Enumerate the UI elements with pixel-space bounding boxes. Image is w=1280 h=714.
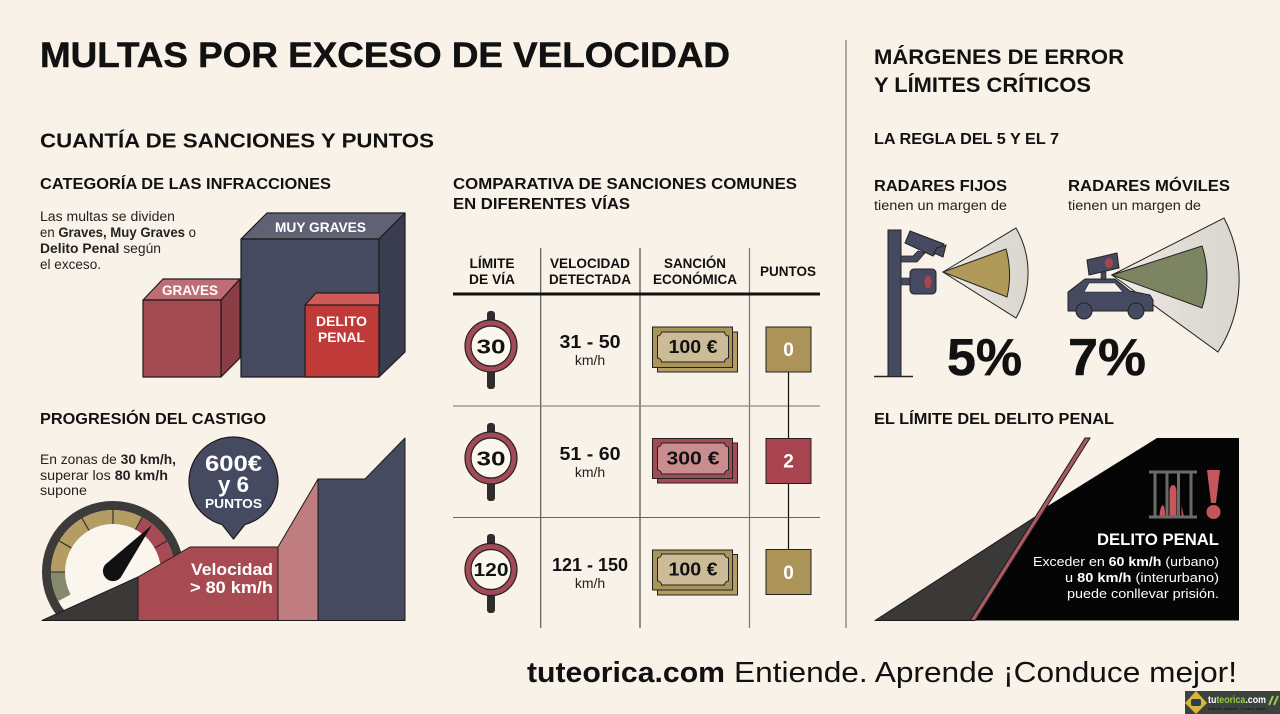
- box: 0 points: 0: [783, 563, 794, 584]
- table header: DETECTADA: [549, 272, 631, 287]
- logo: tuteorica.com: Entiende. Aprende. Conduce mejor.: [1208, 706, 1266, 711]
- table header: SANCIÓN: [664, 256, 726, 271]
- heading: márgenes de error: Y LÍMITES CRÍTICOS: [874, 74, 1091, 97]
- icon: speed sign 30: [465, 423, 517, 501]
- text: speed range: 51 - 60: [560, 443, 620, 464]
- icon: speed sign 120: [465, 534, 517, 613]
- icon: banknote 100 €: [652, 327, 738, 372]
- text: speed range: [560, 443, 620, 480]
- heading: márgenes de error: MÁRGENES DE ERROR: [874, 46, 1124, 69]
- row: 30 km/h, 51-60: [465, 423, 811, 501]
- icon: speed sign 30: 30: [476, 336, 506, 358]
- box: 0 points: [766, 550, 811, 594]
- row: 120 km/h, 121-150: [465, 534, 811, 613]
- table header: LÍMITE: [470, 256, 514, 271]
- block: graves: GRAVES: [162, 283, 218, 298]
- text: speed range: 31 - 50: [560, 331, 620, 352]
- heading: radares fijos: tienen un margen de: [874, 198, 1007, 213]
- text block: categorías: [40, 209, 196, 272]
- heading: radares móviles: RADARES MÓVILES: [1068, 176, 1230, 195]
- stat: 7%: 7%: [1068, 329, 1146, 387]
- icon: banknote 300 €: [652, 438, 738, 483]
- heading: comparativa: EN DIFERENTES VÍAS: [453, 194, 630, 213]
- table header: VELOCIDAD: [550, 256, 630, 271]
- panel: radares móviles: [1068, 176, 1239, 387]
- heading: categoría: CATEGORÍA DE LAS INFRACCIONES: [40, 174, 331, 193]
- icon: prison bars: [1149, 472, 1197, 517]
- logo: tuteorica.com: [1185, 691, 1280, 714]
- box: 2 points: [766, 438, 811, 484]
- callout: 600€ y 6 puntos: PUNTOS: [205, 497, 262, 511]
- box: 0 points: 0: [783, 340, 794, 361]
- text block: categorías: Delito Penal según: [40, 241, 161, 256]
- stat: 5%: 5%: [947, 329, 1022, 387]
- text block: categorías: Las multas se dividen: [40, 209, 175, 224]
- panel: radares fijos: [874, 178, 1028, 387]
- table header: [469, 256, 816, 287]
- text: speed range: km/h: [575, 352, 605, 368]
- row: 30 km/h, 31-50: [465, 311, 811, 389]
- label: velocidad: [190, 560, 273, 597]
- chart: escalating ramp: [42, 438, 405, 620]
- table header: PUNTOS: [760, 264, 816, 279]
- callout: 600€ y 6 puntos: 600€: [205, 451, 262, 476]
- callout: 600€ y 6 puntos: y 6: [218, 472, 249, 497]
- label: velocidad: Velocidad: [191, 560, 273, 579]
- text: speed range: km/h: [575, 464, 605, 480]
- block: delito penal: PENAL: [318, 330, 365, 345]
- heading: comparativa: [453, 176, 797, 213]
- text block: delito penal: DELITO PENAL: [1097, 531, 1219, 549]
- panel: comparativa de sanciones: [453, 176, 820, 628]
- icon: banknote 100 €: 100 €: [668, 337, 718, 357]
- icon: banknote 300 €: 300 €: [666, 448, 720, 468]
- chart: penal ramp: [875, 438, 1239, 620]
- icon: banknote 100 €: [652, 550, 738, 595]
- text block: delito penal: Exceder en 60 km/h (urbano): [1033, 554, 1219, 569]
- heading: comparativa: COMPARATIVA DE SANCIONES COMUNES: [453, 176, 797, 193]
- icon: radar cone: [1112, 218, 1239, 352]
- text block: delito penal: u 80 km/h (interurbano): [1065, 570, 1219, 585]
- icon: fixed radar post: [874, 230, 946, 376]
- block: delito penal: DELITO: [316, 314, 367, 329]
- icon: speed sign 120: 120: [474, 559, 508, 580]
- heading: el límite: EL LÍMITE DEL DELITO PENAL: [874, 409, 1114, 428]
- label: velocidad: > 80 km/h: [190, 578, 273, 597]
- block: muy graves: MUY GRAVES: [275, 219, 366, 235]
- connector line: points: [788, 372, 790, 549]
- panel: categoría de las infracciones: [40, 174, 405, 377]
- block: muy graves: [241, 213, 405, 377]
- table header: DE VÍA: [469, 272, 515, 287]
- icon: exclamation: [1206, 470, 1220, 519]
- panel: progresión del castigo: [40, 409, 405, 638]
- icon: radar car: [1068, 253, 1153, 319]
- block: delito penal: [305, 293, 379, 377]
- text block: delito penal: puede conllevar prisión.: [1067, 586, 1219, 601]
- text: speed range: [552, 554, 628, 591]
- block: graves: [143, 279, 240, 377]
- text block: progresión: superar los 80 km/h: [40, 468, 168, 483]
- box: 2 points: 2: [783, 452, 794, 472]
- heading: progresión: PROGRESIÓN DEL CASTIGO: [40, 409, 266, 428]
- text block: progresión: [40, 452, 176, 498]
- footer tagline: [527, 657, 1237, 689]
- text block: progresión: En zonas de 30 km/h,: [40, 452, 176, 467]
- table header: ECONÓMICA: [653, 272, 737, 287]
- text block: progresión: supone: [40, 483, 87, 498]
- footer tagline: tuteorica.com: [527, 657, 725, 689]
- icon: radar cone: [943, 228, 1028, 318]
- heading: cuantía de sanciones: CUANTÍA DE SANCIONES Y PUNTOS: [40, 130, 434, 152]
- icon: speed sign 30: [465, 311, 517, 389]
- heading: radares fijos: [874, 178, 1007, 213]
- text block: categorías: en Graves, Muy Graves o: [40, 225, 196, 240]
- callout: 600€ y 6 puntos: [189, 437, 278, 539]
- heading: regla del 5 y el 7: LA REGLA DEL 5 Y EL 7: [874, 131, 1059, 148]
- logo: tuteorica.com: tuteorica.com: [1208, 695, 1266, 706]
- heading: márgenes de error: [874, 46, 1124, 97]
- box: 0 points: [766, 327, 811, 372]
- text block: categorías: el exceso.: [40, 257, 101, 272]
- text block: delito penal: [1033, 531, 1219, 601]
- footer tagline: Entiende. Aprende ¡Conduce mejor!: [734, 657, 1237, 689]
- heading: radares fijos: RADARES FIJOS: [874, 178, 1007, 195]
- title: MULTAS POR EXCESO DE VELOCIDAD: [40, 36, 730, 75]
- icon: needle: [103, 525, 152, 581]
- icon: banknote 100 €: 100 €: [668, 560, 718, 580]
- heading: radares móviles: [1068, 176, 1230, 213]
- panel: el límite del delito penal: [874, 409, 1239, 620]
- text: speed range: km/h: [575, 575, 605, 591]
- icon: speed sign 30: 30: [476, 448, 506, 470]
- text: speed range: [560, 331, 620, 368]
- icon: speedometer: [42, 501, 181, 614]
- heading: radares móviles: tienen un margen de: [1068, 198, 1201, 213]
- text: speed range: 121 - 150: [552, 554, 628, 575]
